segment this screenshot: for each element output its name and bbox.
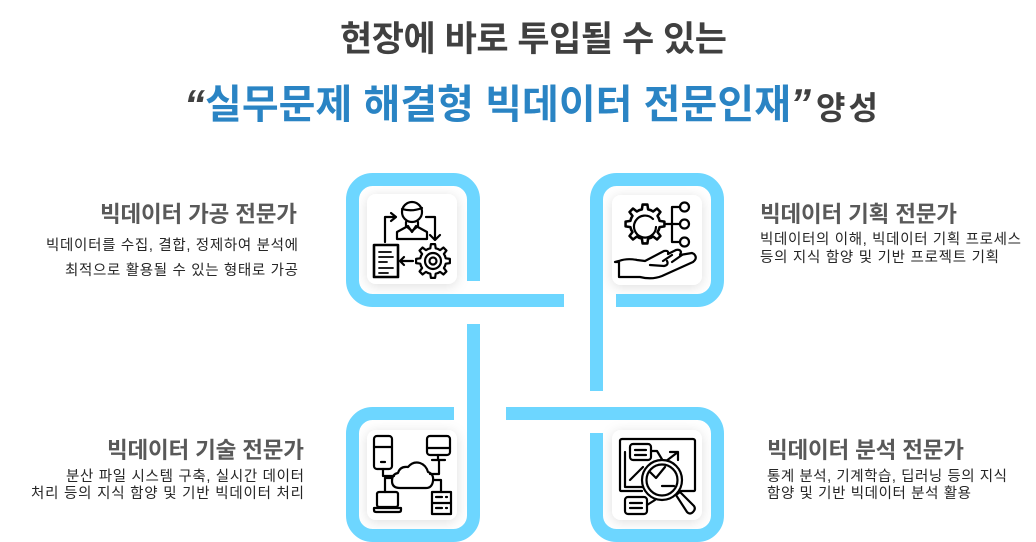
heading: 빅데이터 가공 전문가 xyxy=(100,202,297,227)
icon: person, document and gear process xyxy=(374,202,450,278)
title line 2: highlighted phrase: 실무문제 해결형 빅데이터 전문인재 xyxy=(205,83,791,127)
frame: top-left xyxy=(352,180,564,300)
section: top-left text: 최적으로 활용될 수 있는 형태로 가공 xyxy=(65,262,298,279)
section: top-right text xyxy=(760,202,1021,266)
section: top-left text xyxy=(46,202,298,279)
description: 통계 분석, 기계학습, 딥러닝 등의 지식 xyxy=(767,468,1007,485)
icon: cloud connected to devices xyxy=(374,436,451,514)
frame: bottom-left xyxy=(352,324,474,536)
card: bottom-left icon tile xyxy=(367,430,457,520)
icon: gear network over open hand xyxy=(615,202,696,278)
icon: chart under magnifying glass xyxy=(620,439,695,514)
card: top-right icon tile xyxy=(612,195,702,285)
frame: bottom-right xyxy=(506,414,718,536)
section: bottom-right text xyxy=(767,438,1007,502)
title line 2: opening quote: “ xyxy=(184,81,205,128)
heading: 빅데이터 분석 전문가 xyxy=(767,438,964,463)
card: top-left icon tile xyxy=(367,194,457,284)
section: bottom-left text: 처리 등의 지식 함양 및 기반 빅데이터 처리 xyxy=(31,485,304,502)
section: top-right text: 등의 지식 함양 및 기반 프로젝트 기획 xyxy=(760,249,999,266)
title line 2: suffix: 양성 xyxy=(816,90,878,126)
card: bottom-right icon tile xyxy=(612,430,702,520)
section: bottom-right text: 함양 및 기반 빅데이터 분석 활용 xyxy=(767,485,971,502)
frame: top-right xyxy=(596,180,718,391)
title line 2: closing quote: ” xyxy=(790,80,811,127)
description: 분산 파일 시스템 구축, 실시간 데이터 xyxy=(66,468,304,485)
description: 빅데이터의 이해, 빅데이터 기획 프로세스 xyxy=(760,231,1021,248)
title line 1: 현장에 바로 투입될 수 있는 xyxy=(340,20,727,59)
description: 빅데이터를 수집, 결합, 정제하여 분석에 xyxy=(46,237,298,254)
title xyxy=(184,20,878,128)
heading: 빅데이터 기획 전문가 xyxy=(760,202,957,227)
heading: 빅데이터 기술 전문가 xyxy=(107,438,304,463)
section: bottom-left text xyxy=(31,438,304,502)
